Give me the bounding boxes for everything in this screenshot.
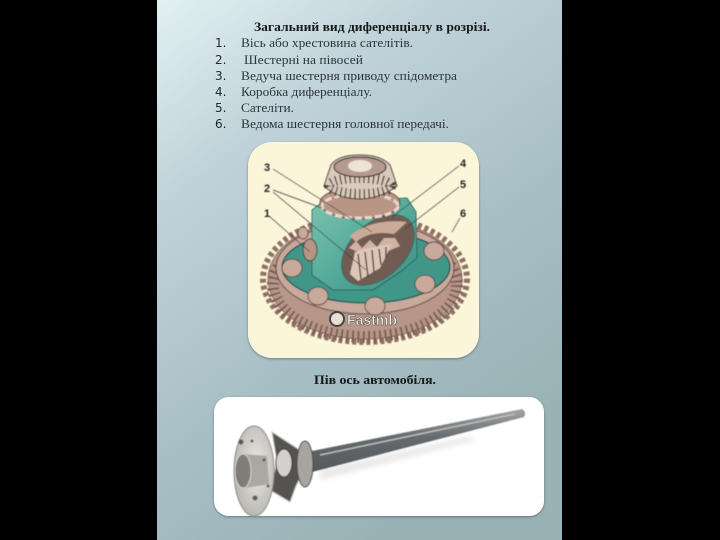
- numbered list of parts: Сателіти.: [241, 100, 294, 115]
- numbered list of parts: [215, 35, 457, 131]
- panel: differential illustration: [248, 142, 479, 358]
- numbered list of parts: Ведома шестерня головної передачі.: [241, 116, 449, 131]
- part numbers: 2: [264, 183, 270, 195]
- flange: [282, 231, 450, 303]
- numbered list of parts: 1.: [215, 36, 226, 50]
- numbered list of parts: Вісь або хрестовина сателітів.: [241, 35, 413, 50]
- numbered list of parts: 6.: [215, 117, 226, 131]
- speedometer drive gear: [320, 187, 400, 219]
- cutaway window with gears: [328, 201, 428, 299]
- watermark: Fastmb: [347, 312, 397, 329]
- photo card: [214, 397, 544, 516]
- bearing plate: [271, 431, 300, 503]
- axle pin: [303, 239, 317, 261]
- heading: differential section view: Загальний вид диференціалу в розрізі.: [254, 19, 490, 34]
- leader lines: [269, 166, 460, 270]
- part numbers: 6: [460, 208, 466, 220]
- part numbers: [264, 158, 467, 220]
- part numbers: 1: [264, 208, 270, 220]
- part numbers: 3: [264, 162, 270, 174]
- panel: half axle photo: [214, 397, 544, 516]
- part numbers: 4: [460, 158, 467, 170]
- caption: half axle: Пів ось автомобіля.: [314, 372, 436, 387]
- numbered list of parts: 3.: [215, 69, 226, 83]
- axle shaft: [312, 409, 525, 472]
- drawing: differential cutaway: [263, 155, 467, 342]
- hub bolt holes: [238, 440, 270, 500]
- numbered list of parts: Ведуча шестерня приводу спідометра: [241, 68, 457, 83]
- bolts: [282, 227, 444, 315]
- slide background panel: [157, 0, 562, 540]
- differential housing: [312, 198, 417, 290]
- tapered bearing: [324, 155, 397, 199]
- part numbers: 5: [460, 179, 466, 191]
- final drive gear: [263, 216, 467, 342]
- hub flange: [234, 426, 274, 516]
- shaft shadow: [320, 436, 475, 480]
- numbered list of parts: Коробка диференціалу.: [241, 84, 372, 99]
- numbered list of parts: 4.: [215, 85, 226, 99]
- numbered list of parts: 5.: [215, 101, 226, 115]
- numbered list of parts: Шестерні на півосей: [244, 52, 363, 67]
- illustration card: [248, 142, 479, 358]
- numbered list of parts: 2.: [215, 53, 226, 67]
